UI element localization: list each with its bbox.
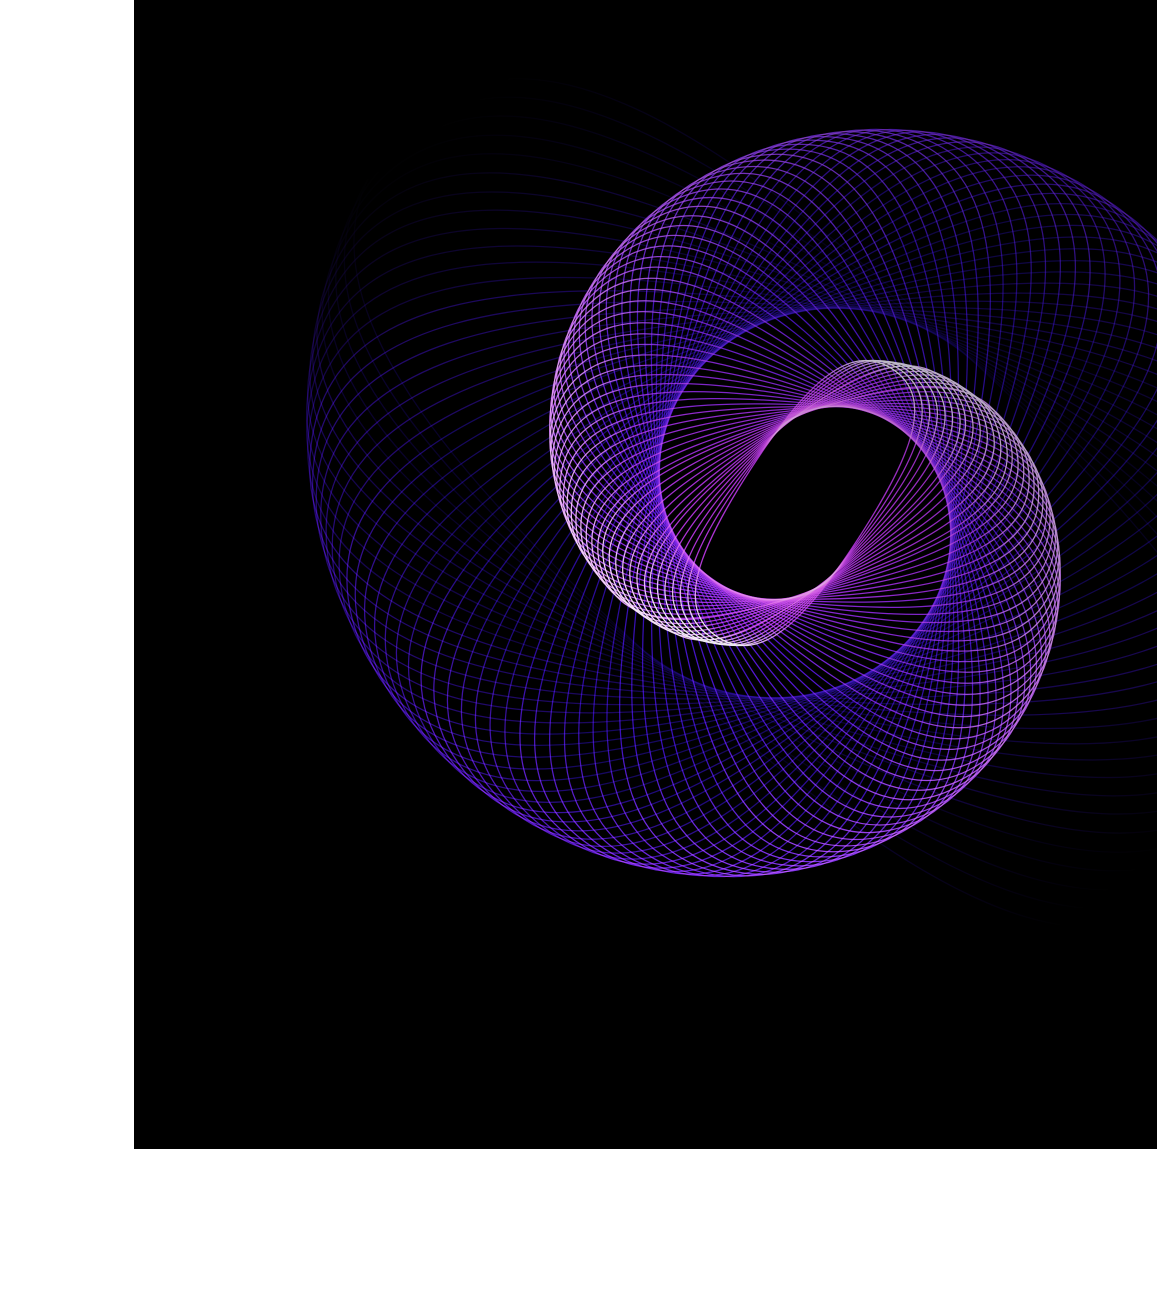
panel: black background <box>134 0 1157 1149</box>
chart: spirograph of rotating curves <box>239 0 1157 1033</box>
